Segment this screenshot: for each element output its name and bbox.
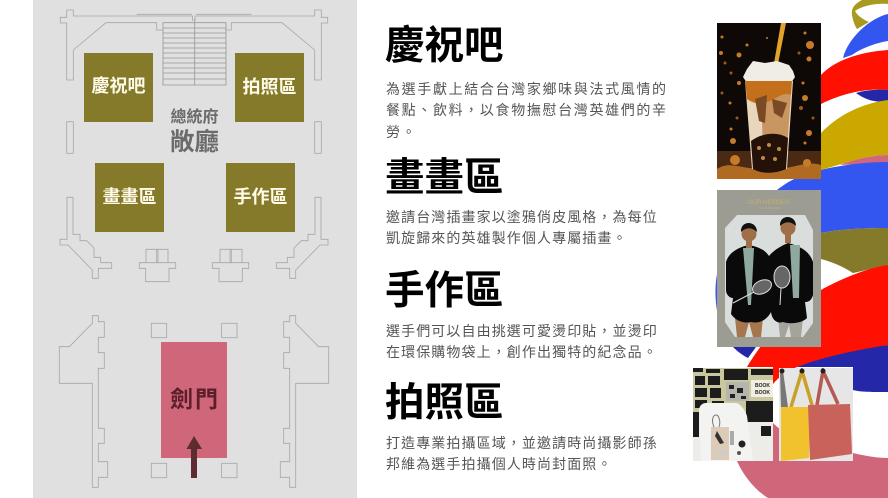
text: 慶祝吧 description bbox=[386, 81, 668, 140]
text: 畫畫區 description: 邀請台灣插畫家以塗鴉俏皮風格，為每位 bbox=[386, 209, 658, 225]
heading: 慶祝吧: 慶祝吧 bbox=[385, 24, 504, 68]
text: 手作區 description: 選手們可以自由挑選可愛燙印貼，並燙印 bbox=[386, 323, 658, 339]
label: 總統府 敞廳: 敞廳 bbox=[170, 129, 219, 156]
zone: 劍門: 劍門 bbox=[170, 386, 220, 412]
image: stamp patches and keychain bbox=[693, 368, 773, 461]
zone: 手作區: 手作區 bbox=[234, 187, 288, 207]
heading: 拍照區: 拍照區 bbox=[385, 381, 504, 425]
image: bubble milk tea bbox=[717, 23, 821, 179]
label: 總統府 敞廳: 總統府 bbox=[170, 109, 218, 126]
panel: floor plan bbox=[33, 0, 357, 498]
text: 手作區 description bbox=[386, 323, 658, 360]
text: 拍照區 description: 打造專業拍攝區域，並邀請時尚攝影師孫 bbox=[386, 435, 658, 451]
zone: 畫畫區: 畫畫區 bbox=[102, 187, 156, 207]
image: badminton heroes poster: OUR HEROES! bbox=[748, 200, 790, 206]
image: stamp patches and keychain: BOOK bbox=[755, 383, 770, 389]
image: stamp patches and keychain: BOOK bbox=[755, 390, 770, 396]
text: 慶祝吧 description: 餐點、飲料，以食物撫慰台灣英雄們的辛 bbox=[386, 102, 668, 118]
text: 手作區 description: 在環保購物袋上，創作出獨特的紀念品。 bbox=[386, 344, 658, 360]
zone: 拍照區: 拍照區 bbox=[242, 77, 296, 97]
zone: 拍照區 bbox=[235, 53, 304, 122]
label: 總統府 敞廳 bbox=[170, 108, 219, 156]
heading: 畫畫區: 畫畫區 bbox=[385, 156, 504, 200]
zone: 慶祝吧 bbox=[84, 53, 153, 122]
text: 慶祝吧 description: 為選手獻上結合台灣家鄉味與法式風情的 bbox=[386, 81, 668, 97]
text: 拍照區 description: 邦維為選手拍攝個人時尚封面照。 bbox=[386, 456, 612, 472]
image: badminton heroes poster bbox=[717, 190, 821, 347]
text: 畫畫區 description bbox=[386, 209, 658, 246]
image: tote bags bbox=[779, 368, 853, 461]
heading: 手作區: 手作區 bbox=[385, 269, 504, 313]
text: 畫畫區 description: 凱旋歸來的英雄製作個人專屬插畫。 bbox=[386, 230, 628, 246]
zone: 手作區 bbox=[226, 163, 295, 232]
image: badminton heroes poster: TEAM TAIWAN bbox=[759, 206, 779, 210]
zone: 畫畫區 bbox=[95, 163, 164, 232]
zone: 劍門 bbox=[161, 342, 227, 458]
text: 拍照區 description bbox=[386, 435, 658, 472]
zone: 慶祝吧: 慶祝吧 bbox=[92, 76, 146, 96]
text: 慶祝吧 description: 勞。 bbox=[386, 124, 417, 140]
